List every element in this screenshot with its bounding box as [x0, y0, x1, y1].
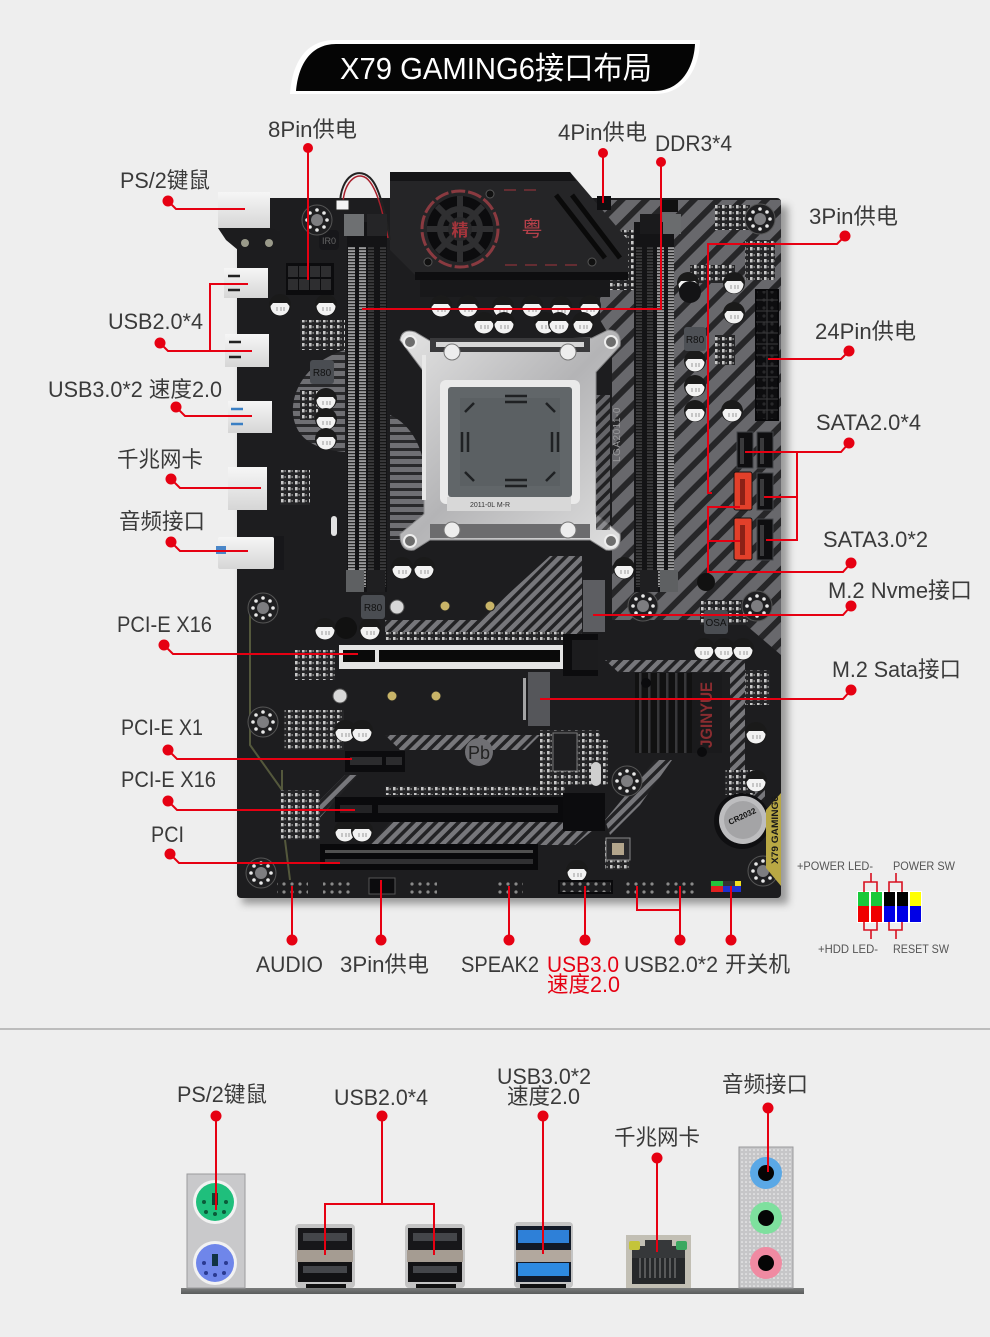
crystal	[591, 762, 601, 786]
chip	[553, 733, 577, 771]
no-lead circle: Pb	[468, 743, 490, 763]
front panel pin diagram: +HDD LED-	[818, 942, 878, 956]
middle diagonal hatch	[605, 760, 672, 835]
vrm capacitors	[269, 272, 767, 882]
front panel pin diagram: +POWER LED-	[797, 859, 873, 873]
right grey hatched zone	[600, 200, 781, 655]
callout lines: left	[154, 196, 358, 863]
rear io labels: 速度2.0	[507, 1084, 580, 1109]
top and side labels: 4Pin供电	[558, 120, 647, 145]
fan	[422, 191, 498, 267]
right memory slots	[634, 200, 681, 592]
callout lines: bottom	[286, 880, 736, 946]
top and side labels: 24Pin供电	[815, 319, 916, 344]
socket: 2011-0L M-R	[470, 502, 510, 509]
usb stack 2	[405, 1224, 465, 1288]
battery	[714, 793, 770, 849]
inductors: R80	[364, 603, 383, 614]
heatsink VRM: 粤	[522, 213, 542, 243]
pci slot	[320, 844, 538, 870]
board shadow	[242, 206, 788, 904]
left diagonal hatch	[285, 775, 358, 840]
usb3 stack	[514, 1222, 573, 1288]
bottom header labels: 开关机	[725, 952, 790, 977]
top and side labels: 音频接口	[119, 509, 205, 534]
socket label: LGA2011-0	[612, 407, 623, 462]
m2 sata slot	[523, 672, 550, 726]
rear io labels: USB3.0*2	[497, 1064, 591, 1089]
ps2 ports	[187, 1174, 245, 1288]
rear io labels: 千兆网卡	[614, 1125, 700, 1150]
front panel pin diagram: RESET SW	[893, 942, 950, 956]
front panel pin diagram: POWER SW	[893, 859, 956, 873]
top and side labels: 8Pin供电	[268, 117, 357, 142]
m2 top mounting screws	[333, 600, 495, 703]
yellow tag	[766, 793, 781, 886]
top and side labels: PCI-E X1	[121, 715, 203, 740]
divider	[0, 1028, 990, 1030]
top and side labels: PCI-E X16	[121, 767, 216, 792]
heatsink VRM	[390, 172, 628, 297]
rear io callout lines	[210, 1102, 774, 1255]
battery: CR2032	[727, 806, 758, 827]
left arc hatch	[293, 350, 345, 452]
chipset frame hatch	[605, 660, 765, 800]
callout lines: top	[303, 143, 666, 309]
lower hatch band	[370, 820, 605, 845]
bottom header labels: USB2.0*2	[624, 952, 718, 977]
rear io labels: PS/2键鼠	[177, 1082, 267, 1107]
rear io floor	[181, 1288, 804, 1294]
8pin power	[286, 263, 334, 295]
chipset heatsink: JGINYUE	[697, 682, 716, 748]
audio plate	[739, 1147, 793, 1288]
inductors: R80	[313, 368, 332, 379]
socket hatch	[596, 395, 610, 530]
sata connectors	[734, 432, 773, 560]
socket	[400, 330, 620, 550]
top and side labels: M.2 Nvme接口	[828, 578, 972, 603]
small chip bottom	[606, 838, 630, 860]
top and side labels: PS/2键鼠	[120, 168, 210, 193]
bottom header labels: AUDIO	[256, 952, 323, 977]
top and side labels: PCI-E X16	[117, 612, 212, 637]
top and side labels: SATA3.0*2	[823, 527, 928, 552]
top and side labels	[48, 117, 972, 847]
fan plug	[336, 200, 349, 210]
rj45 port	[626, 1235, 691, 1288]
board trace line	[250, 610, 290, 880]
m2 nvme slot	[583, 580, 605, 632]
heatsink logo: 精	[452, 216, 468, 241]
bottom header labels: 速度2.0	[547, 972, 620, 997]
fan cable	[340, 173, 390, 240]
top and side labels: DDR3*4	[655, 131, 732, 156]
pcie x1 hatch band	[385, 735, 540, 750]
yellow tag: X79 GAMING6	[770, 796, 781, 864]
top and side labels: M.2 Sata接口	[832, 657, 961, 682]
bottom header labels: SPEAK2	[461, 952, 539, 977]
inductors: R80	[686, 335, 705, 346]
bottom header labels	[256, 952, 790, 997]
bottom header labels: USB3.0	[547, 952, 619, 977]
usb stack 1	[295, 1224, 355, 1288]
top and side labels: 千兆网卡	[117, 447, 203, 472]
m2 slot hatch band	[385, 556, 582, 634]
mid arc hatch	[390, 415, 425, 540]
crystal top	[331, 516, 337, 536]
top and side labels: USB3.0*2 速度2.0	[48, 377, 222, 402]
rear ports on board	[216, 192, 284, 570]
top and side labels: PCI	[151, 822, 184, 847]
24pin power	[755, 289, 779, 421]
callout lines: right	[540, 230, 856, 699]
chipset heatsink	[635, 673, 722, 757]
top and side labels: USB2.0*4	[108, 309, 203, 334]
pcb base	[237, 198, 781, 898]
rear io labels	[177, 1064, 808, 1150]
smd clusters	[280, 205, 775, 870]
no-lead circle	[465, 738, 493, 766]
bottom header labels: 3Pin供电	[340, 952, 429, 977]
top and side labels: 3Pin供电	[809, 204, 898, 229]
bottom headers	[277, 878, 695, 894]
4pin header	[597, 196, 611, 210]
front panel pin diagram	[797, 859, 956, 956]
mounting holes	[246, 204, 778, 888]
rear io labels: USB2.0*4	[334, 1085, 428, 1110]
top and side labels: SATA2.0*4	[816, 410, 921, 435]
pcie x16 slot lower	[335, 793, 605, 831]
title banner	[290, 40, 700, 94]
pcie x1 slot	[345, 751, 405, 772]
pcie x16 slot top	[339, 634, 598, 676]
coloured front panel pins	[711, 881, 741, 892]
rear io labels: 音频接口	[722, 1072, 808, 1097]
left memory slots	[344, 214, 387, 592]
inductors: IR0	[322, 236, 336, 246]
motherboard	[216, 172, 788, 904]
title banner: X79 GAMING6接口布局	[340, 51, 652, 86]
inductors: OSA	[705, 618, 727, 629]
inductors	[310, 230, 728, 639]
